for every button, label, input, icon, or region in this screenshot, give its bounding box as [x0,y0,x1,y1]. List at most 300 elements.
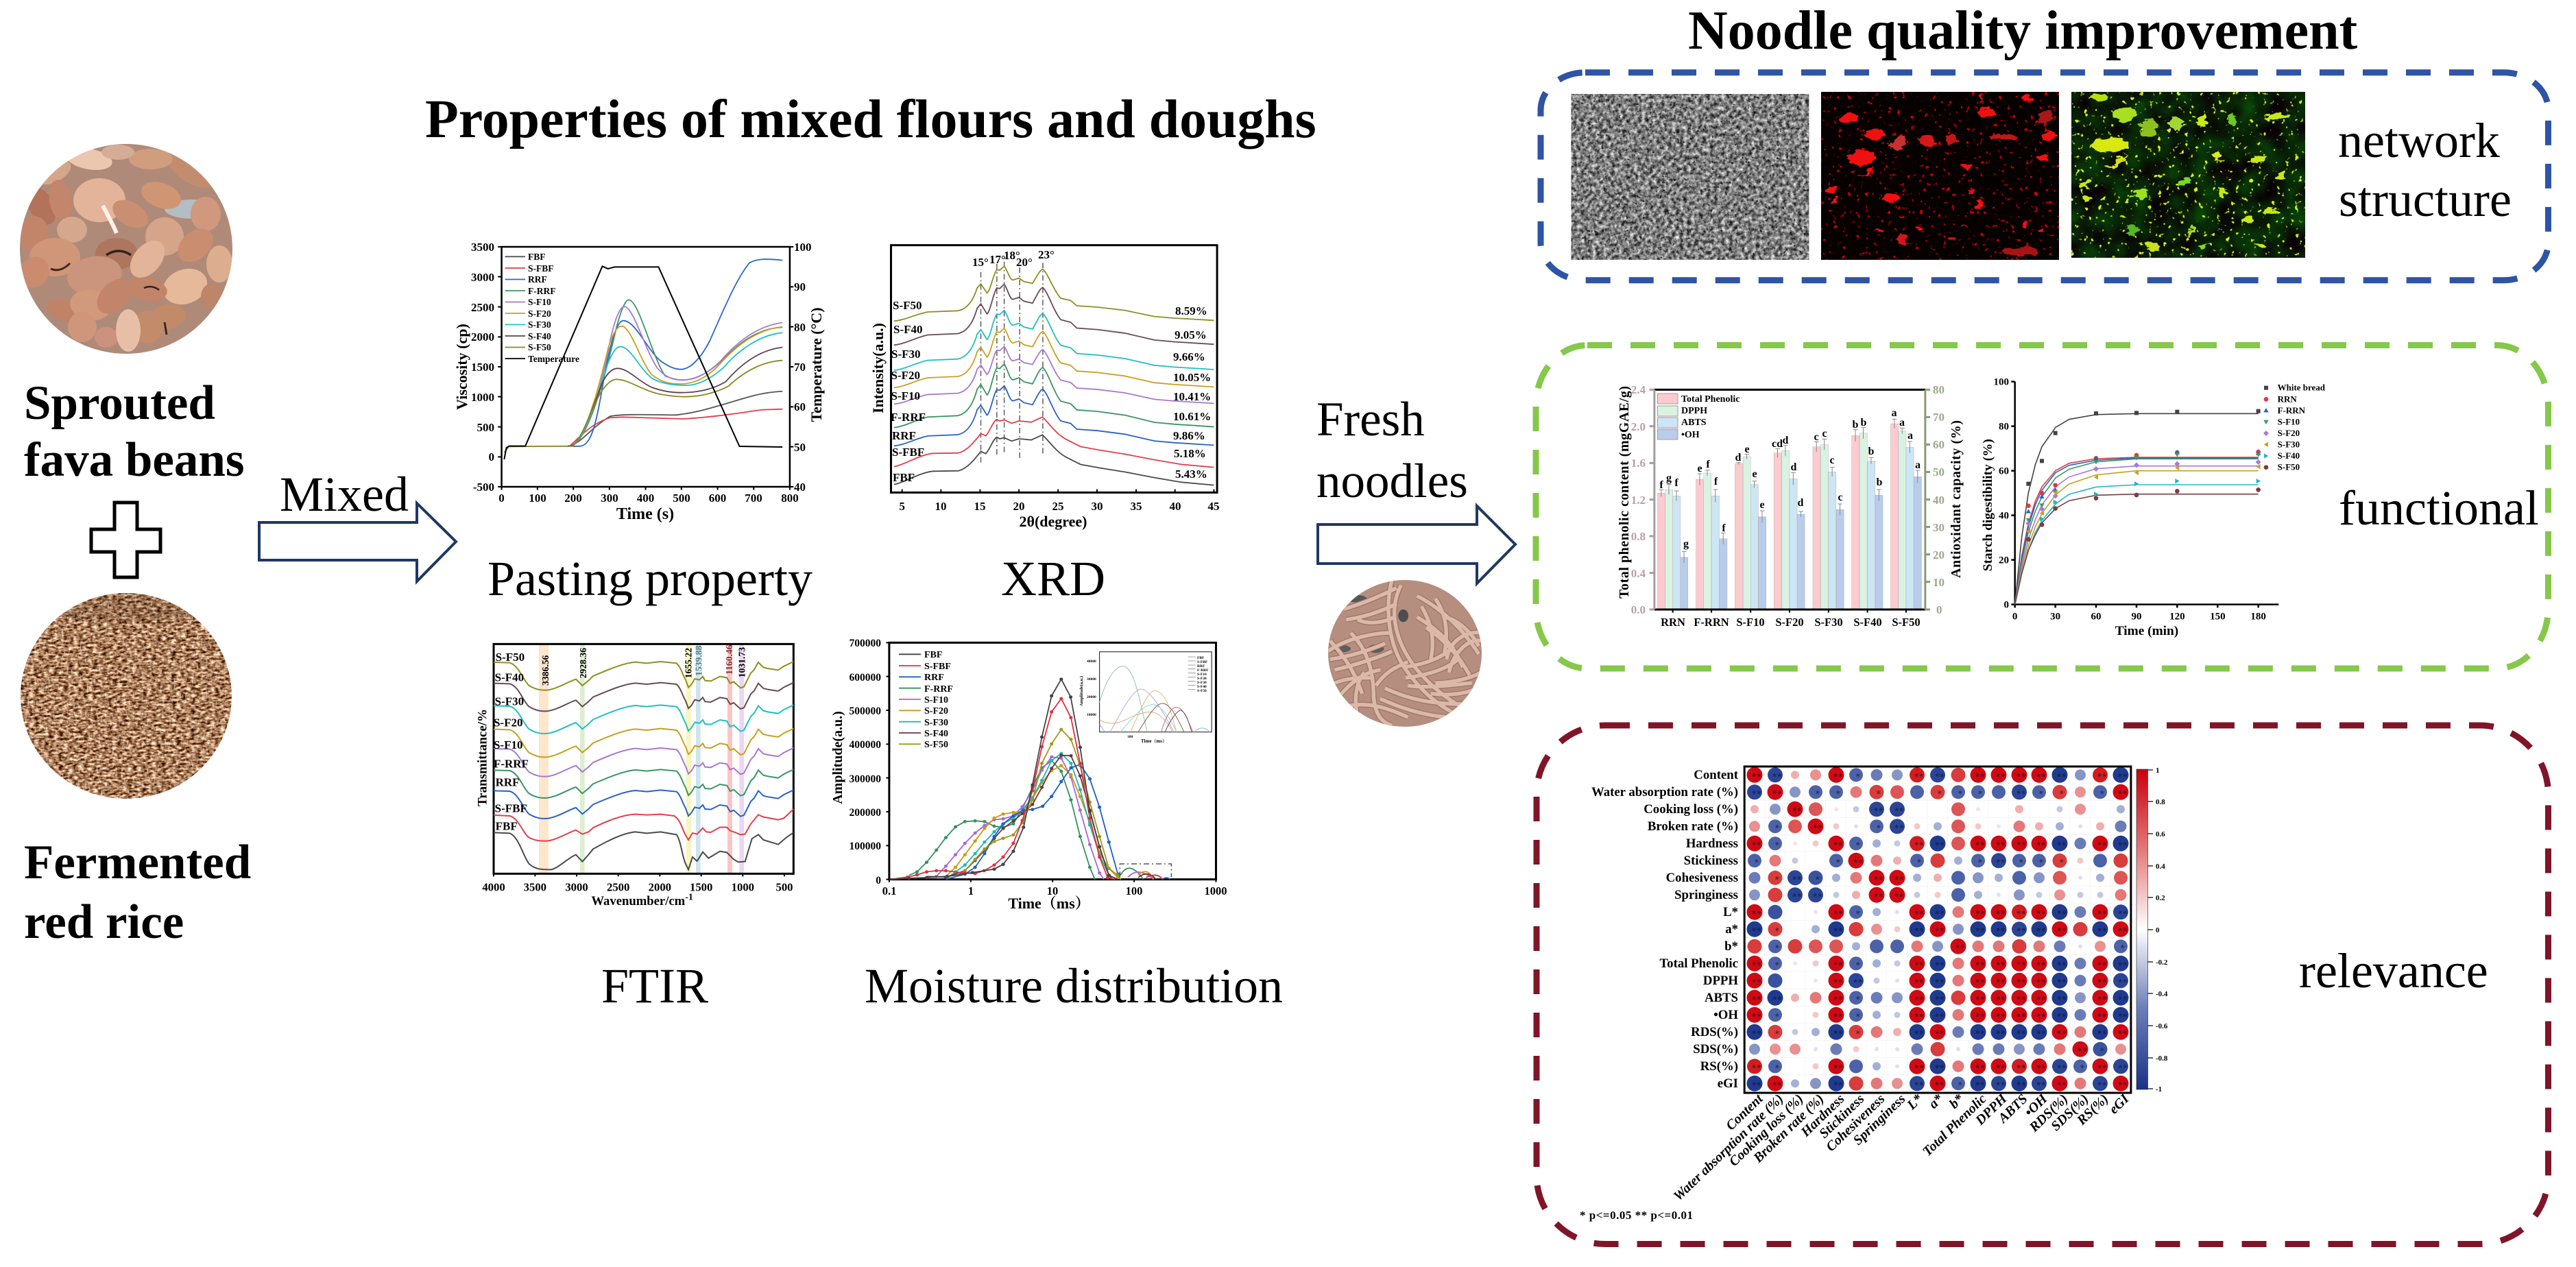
chart: starch digestibility: 100 [1994,376,2009,387]
chart: pasting property: 50 [794,441,806,454]
chart: phenolic and antioxidant bars: c [1829,455,1835,466]
chart: pasting property: 3500 [471,241,494,254]
chart: moisture distribution: 300000 [849,773,881,785]
chart: FTIR: F-RRF [494,757,529,770]
chart: XRD: 20° [1016,256,1033,269]
chart: XRD: 9.66% [1173,350,1205,363]
chart: correlation heatmap: Total Phenolic [1659,956,1738,971]
chart: correlation heatmap: ****** [1792,805,1903,816]
chart: phenolic and antioxidant bars: S-F40 [1853,616,1882,629]
chart: correlation heatmap: ***************** [1753,788,2127,799]
chart: phenolic and antioxidant bars: d [1735,452,1742,463]
chart: phenolic and antioxidant bars: 70 [1933,411,1945,424]
chart: correlation heatmap: *********************** [1753,925,2127,936]
chart: phenolic and antioxidant bars: g [1683,538,1689,550]
chart: phenolic and antioxidant bars: 50 [1933,466,1945,479]
chart: correlation heatmap: ************************* [1753,771,2127,782]
chart: pasting property: 500 [673,492,690,505]
chart: XRD: S-FBF [892,446,924,459]
chart: phenolic and antioxidant bars: 40 [1933,494,1945,507]
chart: starch digestibility: 120 [2169,611,2185,622]
chart: moisture distribution: 20000 [1087,695,1096,699]
label: fermented red rice: red rice [24,895,184,949]
chart: moisture distribution: 0.1 [882,884,896,897]
chart: XRD: 10 [935,500,946,513]
chart: XRD: S-F10 [891,389,920,402]
chart: XRD: 5.43% [1175,468,1207,481]
chart: moisture distribution: 10 [1047,884,1058,897]
chart: pasting property: S-F10 [528,297,551,307]
chart: pasting property: 800 [781,492,799,505]
chart: moisture distribution: 100 [1127,735,1133,739]
chart: phenolic and antioxidant bars: cd [1772,438,1783,450]
chart: moisture distribution [830,638,1227,912]
chart: phenolic and antioxidant bars: Total phenolic content (mgGAE/g) [1617,386,1632,599]
chart: correlation heatmap: Hardness [1798,1091,1848,1140]
chart: phenolic and antioxidant bars: 10 [1933,576,1945,589]
chart: XRD: Intensity(a.u.) [869,323,887,413]
chart: phenolic and antioxidant bars: d [1798,497,1804,509]
chart: phenolic and antioxidant bars: a [1899,417,1905,429]
chart: starch digestibility: 60 [1999,466,2009,476]
chart: XRD [869,245,1219,530]
chart: correlation heatmap: Hardness [1686,836,1738,851]
legend: correlation colour bar: -0.2 [2156,958,2168,967]
chart: moisture distribution: 40000 [1087,660,1096,664]
label: mixed: Mixed [280,467,409,522]
chart: phenolic and antioxidant bars: a [1907,430,1913,442]
chart: moisture distribution: 10000 [1087,713,1096,717]
chart: correlation heatmap: SDS(%) [1693,1042,1738,1057]
chart: phenolic and antioxidant bars: f [1714,476,1718,487]
chart: FTIR: S-F30 [495,695,524,708]
chart: moisture distribution: S-FBF [1197,660,1208,664]
chart: phenolic and antioxidant bars: f [1706,459,1710,470]
chart: moisture distribution: S-F10 [924,695,948,705]
chart: phenolic and antioxidant bars: F-RRN [1694,616,1729,629]
chart: correlation heatmap: DPPH [1972,1091,2011,1129]
legend: correlation colour bar: -0.6 [2156,1022,2168,1030]
chart: moisture distribution: 30000 [1087,677,1096,681]
chart: FTIR: 1500 [690,880,712,893]
chart: pasting property: RRF [528,274,547,285]
chart: pasting property: 40 [794,481,806,494]
chart: phenolic and antioxidant bars: Total Phenolic [1681,394,1740,405]
chart: XRD: F-RRF [891,411,926,424]
chart: FTIR: S-FBF [495,801,527,814]
chart: FTIR: 1539.88 [693,645,703,676]
chart: moisture distribution: S-F20 [924,706,948,716]
chart: FTIR: S-F50 [496,651,525,664]
chart: moisture distribution: S-F30 [924,718,948,728]
legend: correlation colour bar: 0 [2156,926,2160,934]
chart: phenolic and antioxidant bars: g [1666,472,1672,484]
chart: correlation heatmap: Cooking loss (%) [1644,802,1738,817]
chart: pasting property: 1000 [471,391,494,404]
photo: fermented red rice [17,590,237,802]
chart: phenolic and antioxidant bars: DPPH [1681,406,1707,416]
chart: moisture distribution: 200000 [849,807,881,819]
label: XRD: XRD [1001,551,1105,606]
chart: XRD: 9.86% [1173,429,1205,442]
chart: correlation heatmap: Water absorption rate (%) [1591,785,1738,799]
chart: starch digestibility: 60 [2091,611,2101,622]
chart: phenolic and antioxidant bars: S-F30 [1814,616,1843,629]
chart: XRD: 5.18% [1174,447,1206,460]
chart: moisture distribution: Time（ms） [1008,895,1090,912]
chart: FTIR: S-F40 [495,671,524,684]
chart: starch digestibility: 180 [2250,611,2266,622]
label: relevance: relevance [2299,943,2488,998]
chart: moisture distribution: 600000 [849,672,881,684]
chart: FTIR: -1 [685,893,693,903]
chart: correlation heatmap: a* [1725,922,1738,937]
arrow: mixed [259,503,456,581]
chart: XRD: 10.41% [1173,390,1211,403]
chart: phenolic and antioxidant bars: 80 [1933,383,1945,396]
chart: correlation heatmap: *** [2078,1045,2104,1056]
label: fermented red rice: Fermented [24,836,251,889]
chart: XRD: 10.61% [1173,410,1211,423]
chart: phenolic and antioxidant bars: RRN [1661,616,1685,629]
chart: XRD: 15° [972,256,989,269]
chart: pasting property: 100 [794,241,812,254]
chart: starch digestibility: F-RRN [2278,405,2306,415]
chart: pasting property: S-F30 [528,319,551,330]
chart: moisture distribution: S-F40 [924,729,948,739]
chart: moisture distribution: S-F50 [1197,689,1207,693]
chart: moisture distribution: 100000 [849,841,881,852]
chart: pasting property: S-F40 [528,331,551,341]
chart: FTIR: 3000 [565,880,588,893]
chart: XRD: RRF [892,429,916,442]
chart: XRD: 2θ(degree) [1019,513,1087,530]
chart: phenolic and antioxidant bars: 2.0 [1631,420,1646,433]
chart: phenolic and antioxidant bars: S-F10 [1736,616,1765,629]
chart: starch digestibility: Starch digestibility (%) [1981,439,1995,571]
chart: starch digestibility: Time (min) [2115,624,2178,638]
chart: phenolic and antioxidant bars: e [1697,463,1702,474]
chart: phenolic and antioxidant bars: 20 [1933,548,1945,562]
title: properties of mixed flours and doughs: Properties of mixed flours and doughs [425,89,1316,149]
chart: starch digestibility: S-F20 [2278,428,2300,438]
chart: phenolic and antioxidant bars: b [1853,419,1859,431]
chart: moisture distribution: RRF [924,673,944,683]
chart: starch digestibility: 40 [1999,510,2009,521]
chart: phenolic and antioxidant bars: Antioxidant capacity (%) [1949,420,1964,578]
chart: correlation heatmap: •OH [1713,1008,1738,1022]
chart: XRD: S-F40 [893,323,923,336]
title: noodle quality improvement: Noodle quality improvement [1688,1,2358,61]
chart: phenolic and antioxidant bars: 60 [1933,438,1945,451]
chart: correlation heatmap: Stickiness [1684,854,1738,868]
chart: phenolic and antioxidant bars: f [1722,522,1726,534]
chart: pasting property: F-RRF [528,286,555,296]
chart: phenolic and antioxidant bars [1617,383,1964,629]
chart: pasting property: 200 [564,492,582,505]
chart: correlation heatmap: b* [1947,1091,1967,1111]
chart: XRD: 30 [1092,500,1103,513]
photo: sprouted fava beans [14,141,237,360]
label: network structure: structure [2339,172,2512,227]
chart: correlation heatmap: a* [1926,1091,1947,1111]
chart: pasting property: -500 [473,481,494,494]
chart: pasting property: 0 [498,492,505,505]
chart: moisture distribution: Amplitude(a.u.) [830,711,845,804]
chart: moisture distribution: 400000 [849,739,881,751]
icon: plus [91,503,160,577]
image: SEM microstructure [1572,94,1809,260]
chart: pasting property: Temperature [528,354,579,364]
chart: starch digestibility: RRN [2278,394,2297,404]
chart: phenolic and antioxidant bars: 0.4 [1631,567,1646,580]
legend: correlation colour bar: -0.8 [2156,1054,2168,1063]
chart: XRD: S-F50 [893,299,922,312]
chart: correlation heatmap: RDS(%) [1691,1025,1738,1039]
chart: FTIR [475,644,793,908]
chart: phenolic and antioxidant bars: f [1674,477,1678,489]
chart: phenolic and antioxidant bars: 0.0 [1631,603,1646,616]
chart: correlation heatmap: ************************* [1753,1079,2127,1090]
chart: starch digestibility [1981,376,2326,638]
chart: correlation heatmap: **** [1775,942,2125,953]
chart: XRD: FBF [893,471,915,484]
chart: phenolic and antioxidant bars: d [1783,435,1789,446]
chart: correlation heatmap: Cohesiveness [1666,871,1738,885]
chart: moisture distribution: F-RRF [924,684,953,695]
label: fresh noodles: noodles [1316,455,1468,508]
chart: FTIR: 2928.36 [578,648,588,678]
chart: moisture distribution: 1000 [1204,884,1227,897]
chart: correlation heatmap: ABTS [1995,1091,2030,1127]
note: significance levels: * p<=0.05 ** p<=0.01 [1580,1209,1693,1222]
panel: network structure [1541,73,2548,280]
chart: phenolic and antioxidant bars: d [1791,461,1797,473]
chart: correlation heatmap: ******** [1792,891,1903,902]
chart: FTIR: 2000 [649,880,671,893]
photo: fresh noodles [1328,580,1482,727]
legend: correlation colour bar: 0.2 [2156,894,2165,902]
chart: pasting property: S-F20 [528,309,551,319]
chart: pasting property: Viscosity (cp) [453,324,470,410]
chart: correlation heatmap: ******** [1775,873,1903,884]
chart: pasting property [453,241,825,523]
chart: starch digestibility: 150 [2210,611,2226,622]
chart: correlation heatmap: Cohesiveness [1823,1091,1888,1155]
chart: XRD: 8.59% [1175,304,1207,317]
chart: pasting property: 2000 [471,330,494,343]
chart: correlation heatmap: ************************ [1753,839,2127,850]
chart: FTIR: 1031.73 [737,647,747,677]
chart: XRD: 9.05% [1175,328,1207,341]
chart: correlation heatmap: RS(%) [1700,1059,1738,1074]
chart: moisture distribution: Time（ms） [1141,738,1167,744]
chart: XRD: S-F30 [891,348,920,361]
chart: FTIR: 3386.56 [540,655,551,686]
chart: correlation heatmap: ABTS [1705,991,1738,1005]
legend: correlation colour bar: 1 [2156,767,2160,775]
chart: FTIR: 4000 [482,880,505,893]
chart: XRD: 10.05% [1173,371,1211,384]
chart: correlation heatmap: b* [1724,939,1738,954]
chart: FTIR: 500 [776,880,793,893]
chart: XRD: 23° [1038,248,1055,261]
chart: FTIR: 1655.22 [683,648,693,678]
chart: moisture distribution: 1 [968,884,974,897]
label: FTIR: FTIR [601,958,708,1013]
chart: phenolic and antioxidant bars: ABTS [1681,418,1707,428]
chart: moisture distribution: S-F30 [1197,681,1207,685]
chart: pasting property: 700 [745,492,762,505]
chart: correlation heatmap: DPPH [1703,974,1738,988]
chart: FTIR: 2500 [607,880,629,893]
chart: XRD: 25 [1052,500,1064,513]
chart: FTIR: 1000 [732,880,754,893]
chart: phenolic and antioxidant bars: e [1752,468,1757,480]
chart: phenolic and antioxidant bars: c [1822,428,1827,439]
chart: moisture distribution: FBF [924,650,942,660]
chart: FTIR: S-F20 [494,716,522,729]
chart: correlation heatmap: *********** [1755,856,2064,867]
chart: phenolic and antioxidant bars: a [1891,407,1897,419]
chart: pasting property: 80 [794,321,806,334]
chart: pasting property: 0 [488,450,494,463]
chart: starch digestibility: S-F10 [2278,417,2300,427]
chart: phenolic and antioxidant bars: f [1659,479,1663,491]
chart: moisture distribution: Amplitude(a.u.) [1079,676,1084,706]
chart: correlation heatmap: ************************ [1753,1011,2127,1022]
chart: moisture distribution: 0 [876,875,881,886]
chart: XRD: S-F20 [891,369,920,382]
panel: functional [1536,346,2548,668]
chart: pasting property: 600 [709,492,726,505]
chart: pasting property: Temperature (°C) [808,307,825,422]
chart: phenolic and antioxidant bars: e [1744,444,1750,455]
chart: correlation heatmap: eGI [2106,1091,2132,1117]
chart: phenolic and antioxidant bars: 0.8 [1631,530,1646,543]
chart: phenolic and antioxidant bars: 0 [1936,603,1942,616]
arrow: fresh noodles [1318,506,1515,583]
chart: correlation heatmap: eGI [1718,1076,1738,1091]
legend: correlation colour bar: -1 [2156,1085,2162,1094]
chart: FTIR: S-F10 [494,738,522,751]
image: green fluorescence micrograph [2071,92,2305,258]
chart: correlation heatmap: Content [1723,1091,1767,1133]
chart: correlation heatmap: ************************* [1753,993,2127,1004]
chart: correlation heatmap: ****** [1775,822,1903,833]
chart: correlation heatmap: SDS(%) [2048,1091,2091,1134]
chart: moisture distribution: F-RRF [1197,668,1209,673]
chart: FTIR: 1160.46 [724,644,734,675]
chart: pasting property: 90 [794,280,806,293]
chart: correlation heatmap: L* [1723,905,1738,919]
chart: pasting property: 70 [794,361,806,374]
chart: correlation heatmap: RDS(%) [2026,1091,2071,1135]
chart: correlation heatmap: Cooking loss (%) [1726,1091,1806,1170]
chart: XRD: 40 [1170,500,1181,513]
chart: correlation heatmap: •OH [2022,1091,2051,1120]
chart: starch digestibility: 0 [2003,599,2009,610]
label: network structure: network [2338,113,2500,168]
chart: XRD: 5 [899,500,905,513]
chart: pasting property: 60 [794,400,806,413]
chart: moisture distribution: RRF [1197,664,1205,668]
label: fresh noodles: Fresh [1316,393,1425,446]
chart: pasting property: Time (s) [616,505,674,523]
chart: phenolic and antioxidant bars: e [1759,499,1765,511]
chart: FTIR: RRF [496,776,520,789]
chart: starch digestibility: 20 [1999,555,2009,566]
legend: correlation colour bar: -0.4 [2156,990,2168,998]
chart: phenolic and antioxidant bars: a [1915,459,1921,471]
legend: correlation colour bar: 0.6 [2156,830,2165,838]
chart: pasting property: 300 [601,492,618,505]
chart: XRD: 20 [1013,500,1024,513]
image: red fluorescence micrograph [1821,92,2059,260]
chart: phenolic and antioxidant bars: 2.4 [1631,383,1646,396]
legend: correlation colour bar: 0.4 [2156,862,2165,871]
chart: correlation heatmap: ************************ [1753,1062,2127,1073]
chart: moisture distribution: S-F40 [1197,685,1207,689]
chart: phenolic and antioxidant bars: 1.6 [1631,457,1646,470]
chart: correlation heatmap: Broken rate (%) [1648,819,1738,834]
chart: pasting property: 500 [477,421,494,434]
chart: pasting property: 2500 [471,301,494,314]
chart: pasting property: 100 [529,492,546,505]
chart: correlation heatmap: ************************ [1753,976,2127,987]
chart: pasting property: 400 [637,492,654,505]
chart: starch digestibility: 30 [2050,611,2060,622]
chart: FTIR: Wavenumber/cm [591,894,685,908]
chart: pasting property: S-FBF [528,263,554,274]
chart: correlation heatmap: Water absorption rate (%) [1671,1091,1786,1204]
chart: XRD: 35 [1130,500,1142,513]
chart: moisture distribution: 100 [1126,884,1142,897]
chart: correlation heatmap: *********************** [1753,908,2127,919]
chart: moisture distribution: S-F20 [1197,677,1207,681]
chart: starch digestibility: 90 [2132,611,2141,622]
chart: starch digestibility: S-F30 [2278,439,2300,449]
chart: XRD: 15 [974,500,986,513]
chart: phenolic and antioxidant bars: c [1814,431,1819,443]
legend: correlation colour bar [2136,767,2168,1094]
chart: starch digestibility: S-F50 [2278,462,2300,472]
chart: phenolic and antioxidant bars: c [1838,492,1843,503]
chart: correlation heatmap: Springiness [1674,888,1738,902]
chart: FTIR: 3500 [524,880,546,893]
chart: phenolic and antioxidant bars: b [1877,476,1883,488]
chart: starch digestibility: White bread [2278,383,2326,393]
chart: XRD: 18° [1004,249,1020,262]
chart: correlation heatmap: Stickiness [1816,1091,1868,1142]
chart: correlation heatmap: RS(%) [2073,1091,2111,1129]
chart: phenolic and antioxidant bars: b [1868,446,1875,457]
chart: phenolic and antioxidant bars: S-F20 [1775,616,1804,629]
chart: correlation heatmap: ************************ [1753,959,2127,970]
chart: phenolic and antioxidant bars: b [1861,417,1867,429]
chart: phenolic and antioxidant bars: •OH [1681,430,1700,440]
chart: XRD: 17° [989,253,1006,266]
chart: starch digestibility: 0 [2012,611,2017,622]
chart: correlation heatmap [1591,767,2132,1204]
chart: pasting property: 3000 [471,271,494,284]
chart: XRD: 45 [1208,500,1219,513]
chart: phenolic and antioxidant bars: S-F50 [1892,616,1921,629]
chart: moisture distribution: S-FBF [924,662,951,672]
chart: correlation heatmap: Content [1694,768,1739,782]
chart: pasting property: FBF [528,252,546,262]
chart: moisture distribution: 500000 [849,705,881,717]
